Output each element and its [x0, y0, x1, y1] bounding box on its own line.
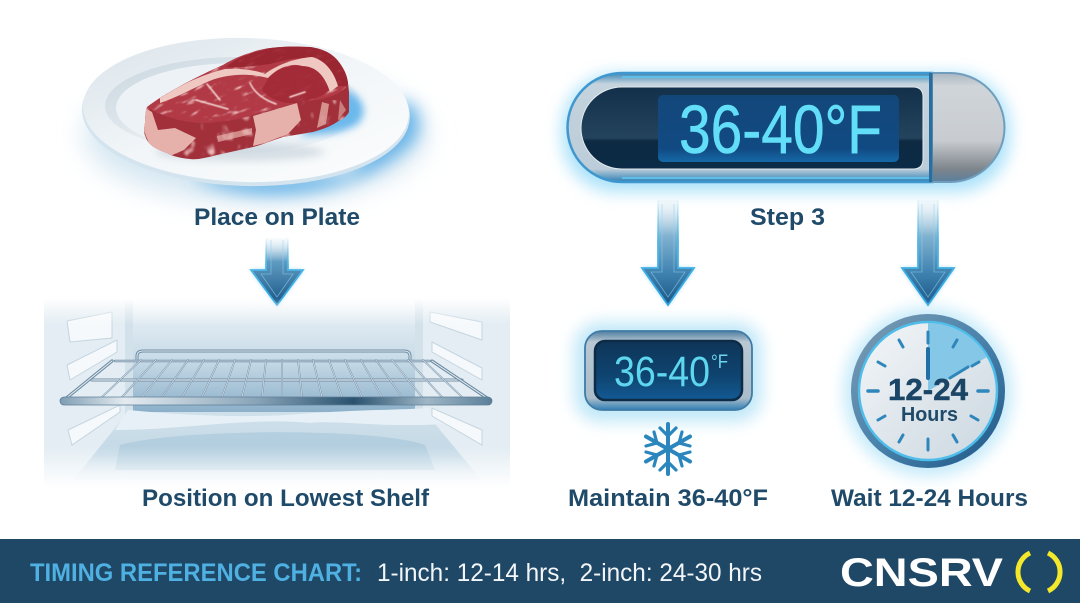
label: Wait 12-24 Hours: Wait 12-24 Hours: [831, 485, 1028, 512]
timing values: 1-inch: 12-14 hrs, 2-inch: 24-30 hrs: [377, 559, 762, 587]
logo mark: yellow brackets: [1018, 553, 1060, 591]
small temperature display: [585, 331, 752, 410]
label: Place on Plate: Place on Plate: [194, 204, 360, 231]
small temperature display: 36-40: [614, 348, 710, 396]
label: Step 3: Step 3: [750, 204, 825, 231]
thermometer glow: [562, 74, 1010, 192]
clock glow: [844, 308, 1012, 476]
timing reference heading: TIMING REFERENCE CHART:: [30, 559, 362, 587]
arrow: thermometer to timer: [902, 200, 954, 305]
display glow: [574, 322, 762, 422]
panel: maintain temperature: [568, 322, 768, 512]
thermometer body: [568, 73, 1004, 182]
fridge interior: [44, 298, 510, 490]
small temperature display: °F: [711, 352, 728, 373]
plate shadow glow: [85, 69, 425, 201]
wire shelf: [60, 351, 492, 405]
arrow: plate down to shelf: [251, 238, 303, 305]
icon: snowflake: [646, 424, 690, 474]
steak fat patches: [143, 100, 346, 156]
panel: wait timer: [831, 308, 1028, 512]
plate: [80, 34, 412, 190]
steak: [144, 46, 349, 160]
clock dial: [851, 314, 1005, 468]
LCD readout: 36-40°F: [679, 91, 882, 168]
clock dial: Hours: [901, 404, 958, 426]
steak top surface: [147, 46, 348, 123]
footer band: [0, 539, 1080, 603]
label: Position on Lowest Shelf: Position on Lowest Shelf: [142, 485, 430, 512]
arrow: thermometer to temperature display: [642, 200, 694, 305]
panel: digital thermometer: [562, 73, 1010, 231]
label: Maintain 36-40°F: Maintain 36-40°F: [568, 485, 768, 512]
panel: fridge shelf: [44, 298, 510, 512]
logo: CNSRV: CNSRV: [840, 551, 1003, 595]
clock dial: 12-24: [888, 372, 969, 407]
panel: plate with steak: [76, 38, 436, 225]
